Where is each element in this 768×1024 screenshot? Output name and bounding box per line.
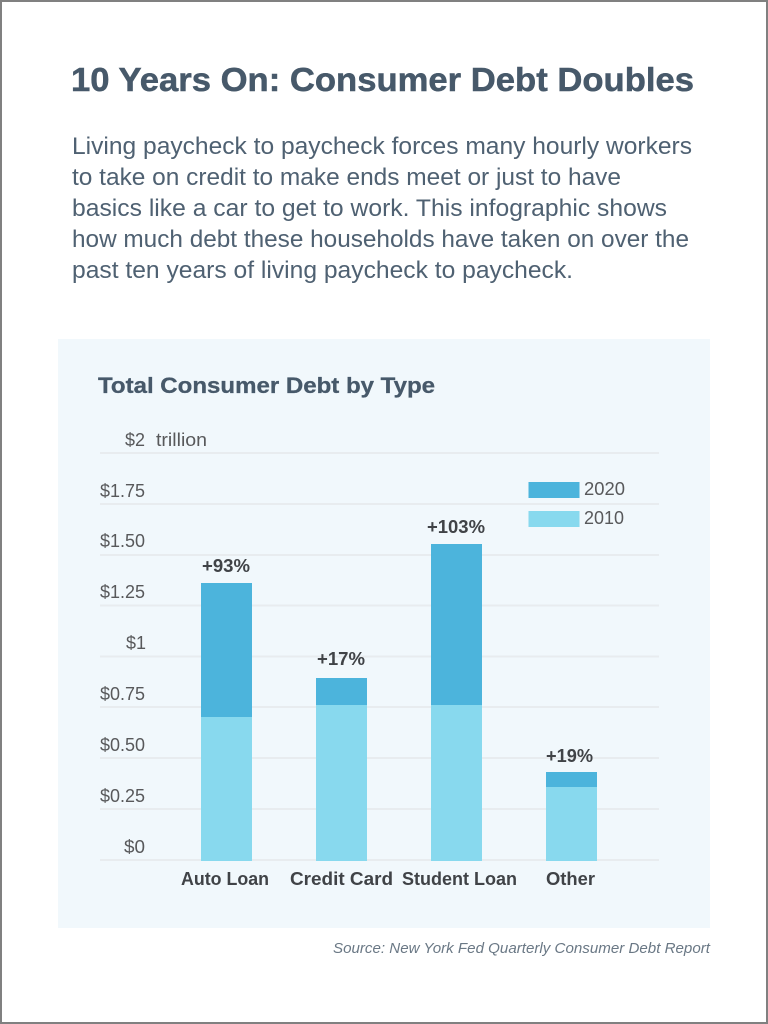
percent change labels: +17% [317,649,365,669]
category labels: Other [546,869,595,889]
category labels: Credit Card [290,869,393,889]
percent change labels: +93% [202,556,250,576]
intro paragraph: basics like a car to get to work. This infographic shows [72,195,667,222]
title: 10 Years On: Consumer Debt Doubles [71,62,694,99]
panel: chart [58,339,710,928]
bar: credit card [316,678,367,861]
category labels [181,869,595,889]
percent change labels [202,517,593,766]
y axis labels [100,430,146,857]
y axis labels: $0 [124,837,145,857]
y axis labels: $0.25 [100,786,145,806]
intro paragraph: to take on credit to make ends meet or just to have [72,164,621,191]
axis unit label: trillion [156,430,207,450]
intro paragraph: past ten years of living paycheck to paycheck. [72,257,573,284]
legend: 2010 [584,508,624,528]
category labels: Auto Loan [181,869,269,889]
chart heading: Total Consumer Debt by Type [98,373,435,398]
y axis labels: $1.50 [100,531,145,551]
percent change labels: +103% [427,517,485,537]
legend [528,479,625,528]
y axis labels: $1.25 [100,582,145,602]
percent change labels: +19% [546,746,593,766]
legend: 2020 [584,479,625,499]
category labels: Student Loan [402,869,517,889]
source note: Source: New York Fed Quarterly Consumer Debt Report [333,940,711,957]
y axis labels: $0.75 [100,684,145,704]
intro paragraph: Living paycheck to paycheck forces many hourly workers [72,133,692,160]
y axis labels: $0.50 [100,735,145,755]
y axis labels: $1 [126,633,146,653]
bar chart [100,430,659,889]
bar: auto loan [201,583,252,861]
y axis labels: $2 [125,430,145,450]
intro paragraph: how much debt these households have taken on over the [72,226,689,253]
bar: other [546,772,597,861]
y axis labels: $1.75 [100,481,145,501]
bar: student loan [431,544,482,861]
intro paragraph [72,133,692,284]
